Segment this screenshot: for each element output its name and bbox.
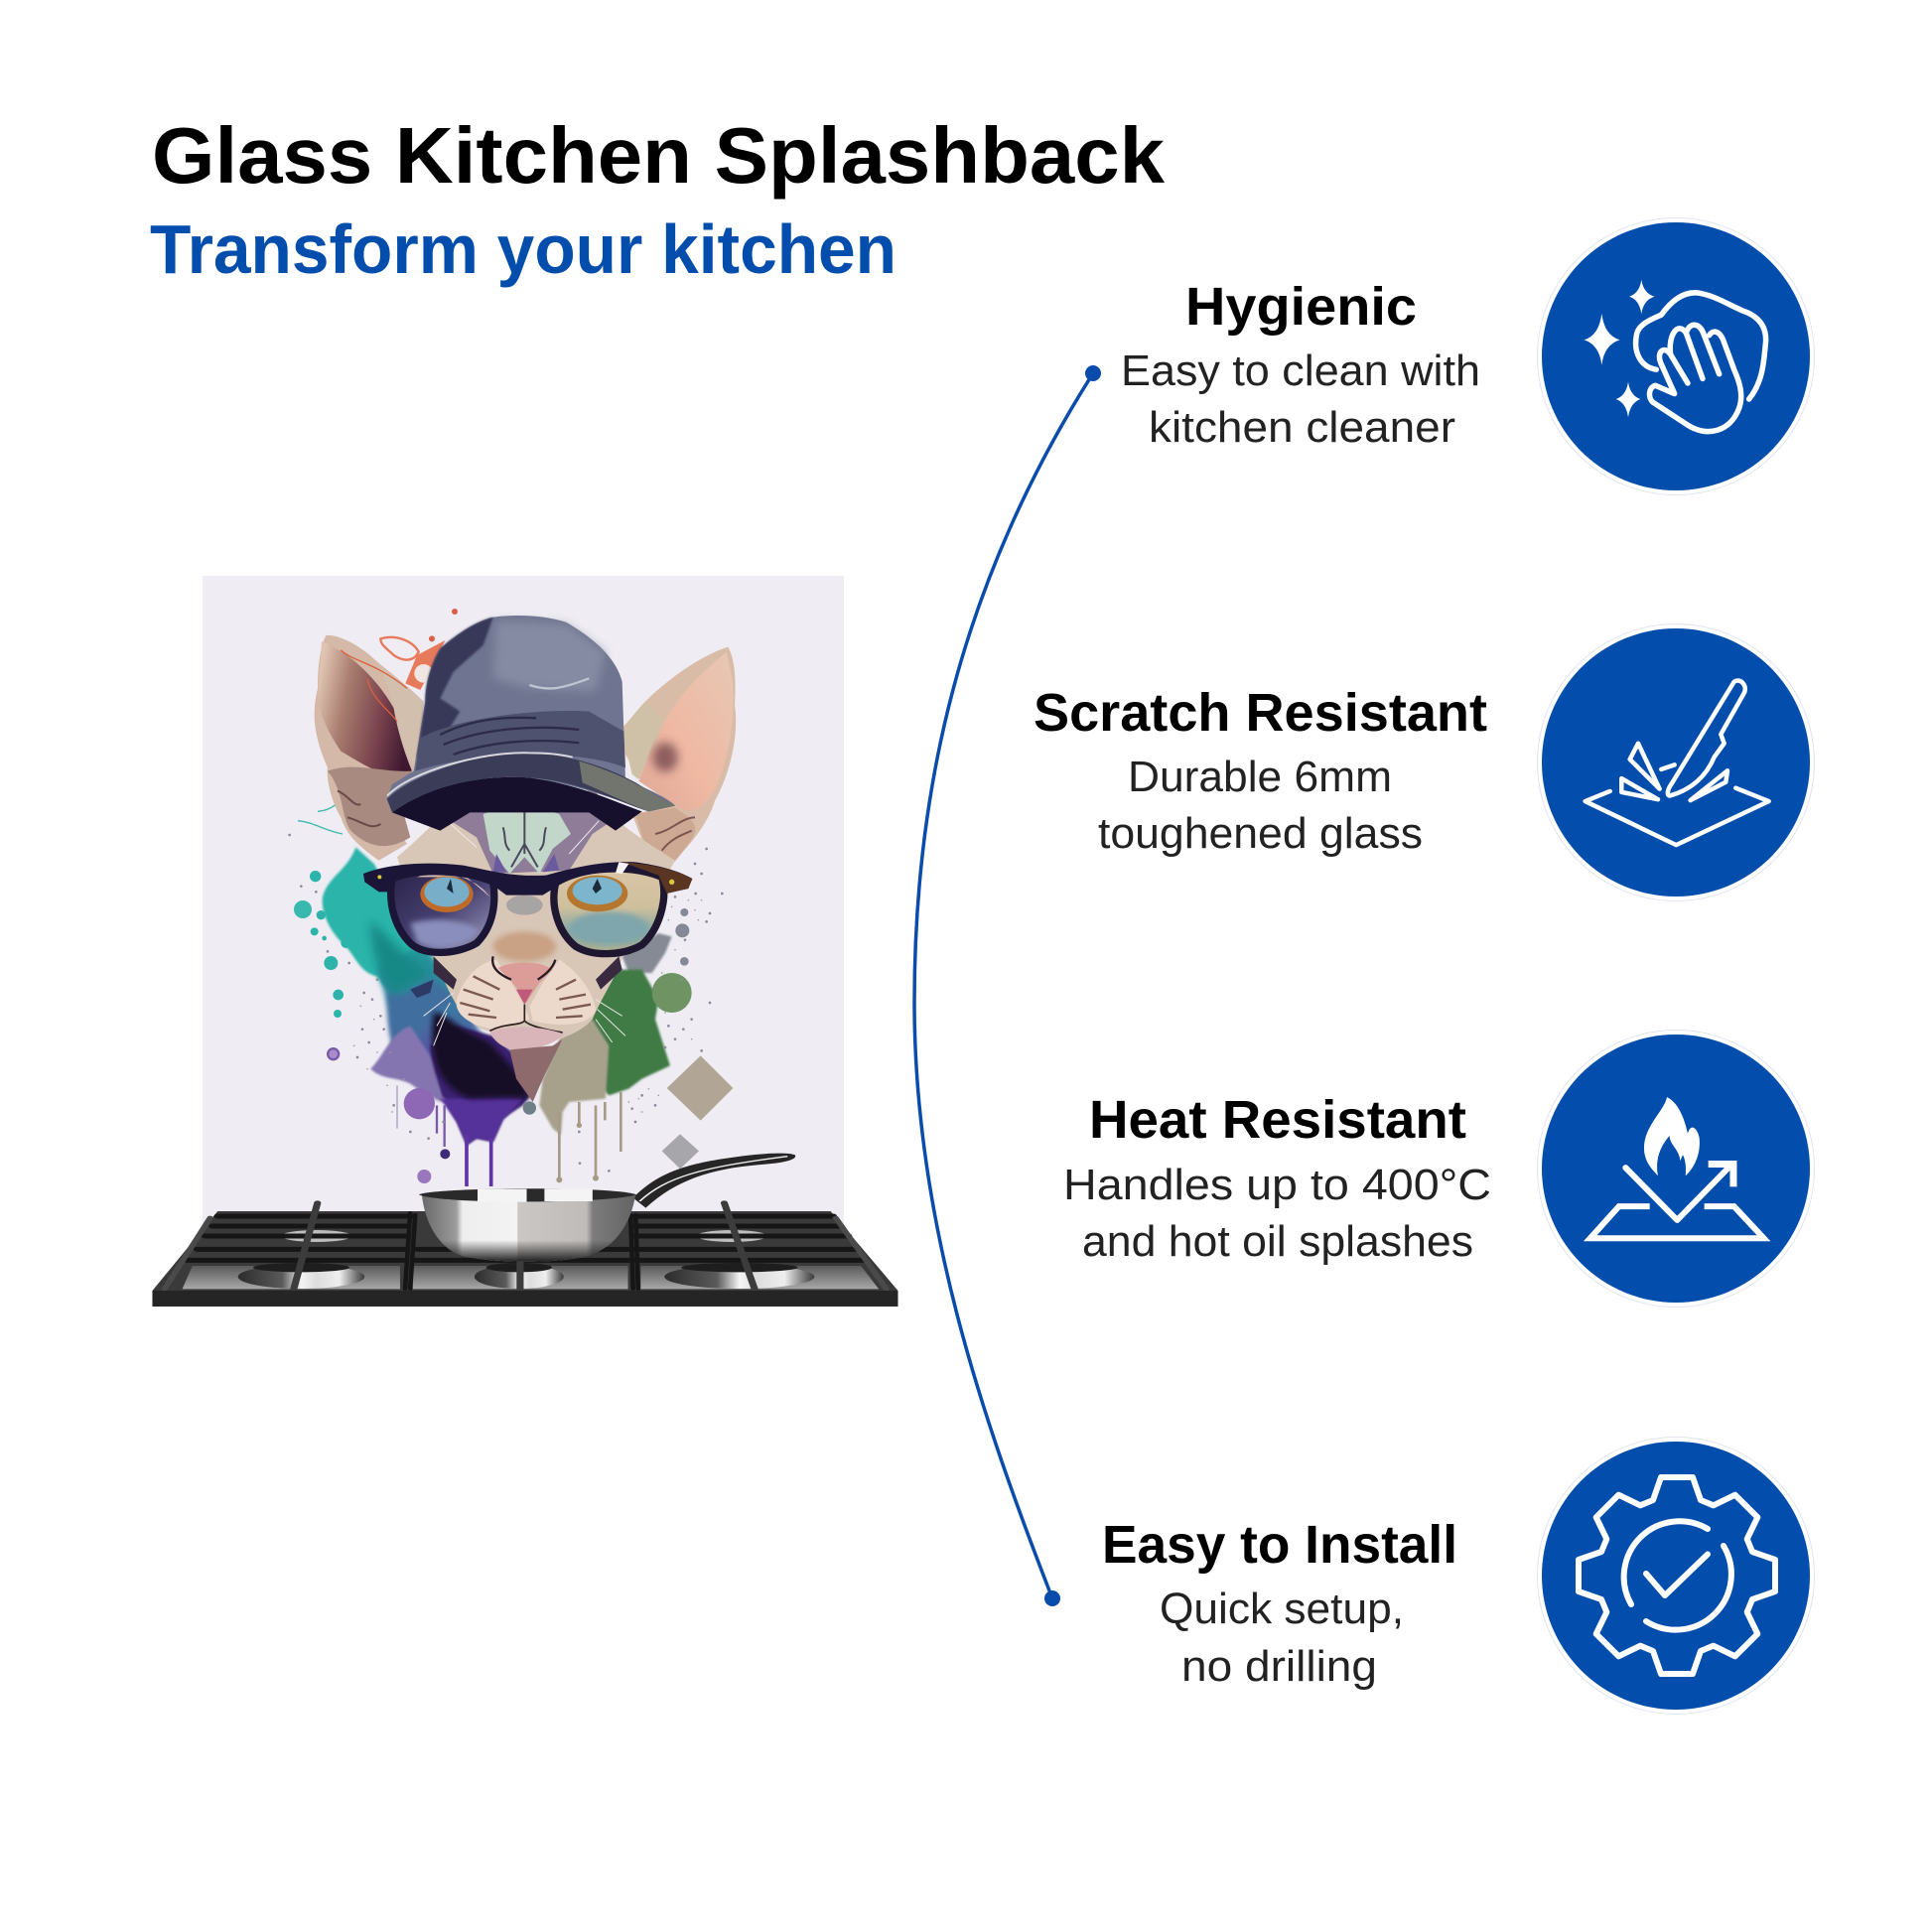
icon: knife scratching glass xyxy=(1537,623,1815,901)
icon: gear with check mark xyxy=(1537,1438,1815,1714)
cat muzzle and nose xyxy=(410,956,625,1102)
feature: Hygienic xyxy=(1121,277,1480,452)
upper head layer xyxy=(298,609,736,867)
icon: hand wiping with sparkles xyxy=(1537,218,1815,494)
paint splashes xyxy=(323,847,692,1145)
feature: Hygienic: kitchen cleaner xyxy=(1149,403,1455,452)
feature: Heat Resistant xyxy=(1063,1090,1491,1266)
description: Quick setup, xyxy=(1160,1585,1404,1633)
left eye xyxy=(420,876,474,912)
right eye xyxy=(567,876,627,911)
feature: Easy to Install xyxy=(1102,1515,1457,1691)
description: Easy to clean with xyxy=(1121,346,1480,395)
burners xyxy=(238,1230,814,1289)
grey diamond xyxy=(662,1134,699,1169)
burner windows xyxy=(183,1266,879,1289)
tan diamond xyxy=(667,1055,733,1121)
cooktop front edge xyxy=(152,1291,897,1307)
connector dot bottom xyxy=(1044,1590,1060,1606)
description: Durable 6mm xyxy=(1128,753,1392,801)
feature: Scratch Resistant xyxy=(1034,683,1487,858)
cooktop grates xyxy=(165,1203,887,1289)
feature: Heat Resistant: and hot oil splashes xyxy=(1082,1217,1473,1266)
gas cooktop xyxy=(152,1154,897,1307)
teal streak xyxy=(298,804,343,834)
title: Glass Kitchen Splashback xyxy=(152,111,1166,200)
left ear xyxy=(315,635,424,861)
subtitle: Transform your kitchen xyxy=(150,210,897,288)
feature: Scratch Resistant: toughened glass xyxy=(1098,809,1423,858)
connector dot top xyxy=(1085,365,1101,381)
icon: flame deflected from surface xyxy=(1537,1031,1815,1307)
cat glasses xyxy=(363,862,692,954)
heading: Heat Resistant xyxy=(1089,1090,1466,1150)
splashback panel xyxy=(203,576,844,1233)
heading: Easy to Install xyxy=(1102,1515,1457,1575)
connector curve xyxy=(914,373,1093,1598)
frying pan xyxy=(419,1154,795,1262)
drips and dots xyxy=(290,835,722,1186)
feature: Easy to Install: no drilling xyxy=(1181,1642,1377,1691)
cat artwork xyxy=(290,609,736,1186)
cat face xyxy=(397,791,675,1042)
heading: Scratch Resistant xyxy=(1034,683,1487,743)
product image: splashback with cooktop xyxy=(152,576,897,1307)
cat hat xyxy=(386,616,675,831)
heading: Hygienic xyxy=(1185,277,1417,337)
right ear xyxy=(622,647,736,867)
orange splash xyxy=(380,609,458,690)
description: Handles up to 400°C xyxy=(1063,1161,1491,1209)
